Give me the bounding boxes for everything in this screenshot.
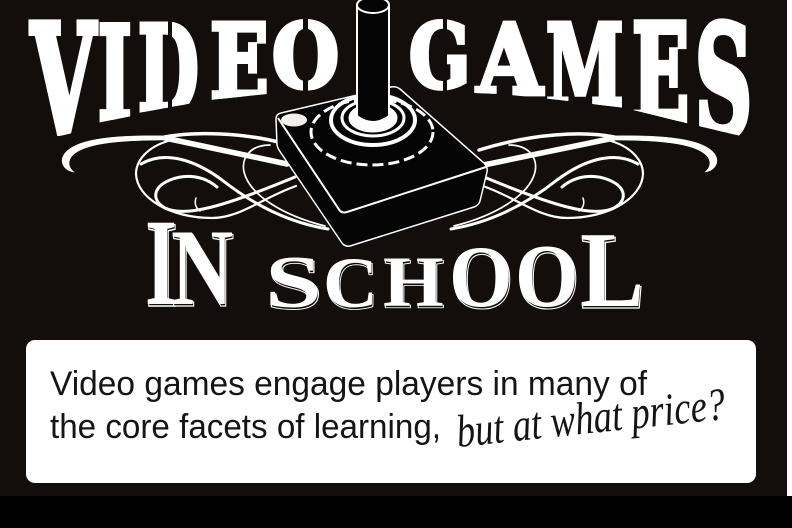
ornamental swirls: left: [62, 134, 328, 229]
subtitle offset outline: L: [581, 213, 645, 332]
subtitle offset outline: I: [146, 195, 178, 333]
title: Games: G: [409, 5, 470, 109]
subtitle letters: I: [145, 193, 177, 331]
ornamental swirls: right: [451, 134, 717, 229]
title: Games: A: [476, 4, 544, 118]
intro text line 2: the core facets of learning,: [50, 408, 441, 446]
joystick fire button: [281, 114, 307, 126]
handwritten callout: but at what price?: [454, 378, 728, 457]
title: Video: O: [272, 4, 339, 108]
subtitle letters: O: [515, 226, 579, 326]
joystick base: [276, 87, 487, 246]
subtitle letters: O: [449, 228, 513, 326]
intro text line 1: Video games engage players in many of: [50, 365, 648, 403]
title: Video: E: [210, 1, 269, 124]
joystick rings: [331, 95, 415, 145]
joystick stick cap: [357, 0, 389, 13]
icon: joystick: [276, 0, 487, 246]
subtitle letters: [145, 193, 644, 331]
title: Video: D: [138, 1, 199, 141]
subtitle letters: L: [580, 211, 644, 330]
subtitle offset outline: [146, 195, 645, 333]
subtitle offset outline: N: [172, 211, 234, 330]
subtitle letters: C: [323, 244, 378, 324]
joystick dashed ring: [311, 99, 433, 165]
title: Video: I: [98, 0, 132, 151]
subtitle offset outline: O: [450, 230, 514, 328]
title: Video: [28, 19, 338, 136]
subtitle offset outline: O: [516, 228, 580, 328]
subtitle letters: H: [383, 243, 444, 322]
subtitle offset outline: C: [324, 246, 379, 326]
subtitle offset outline: H: [384, 245, 445, 324]
joystick stick: [357, 5, 389, 122]
title: Games: [410, 18, 750, 136]
subtitle letters: N: [171, 209, 233, 328]
joystick top edge line: [278, 118, 486, 212]
subtitle offset outline: S: [266, 244, 323, 326]
subtitle: In School: [145, 193, 645, 333]
subtitle letters: S: [265, 242, 322, 324]
panel: intro card: [26, 340, 756, 483]
stencil gaps in title letters: [168, 18, 447, 118]
title: Games: M: [546, 1, 623, 134]
